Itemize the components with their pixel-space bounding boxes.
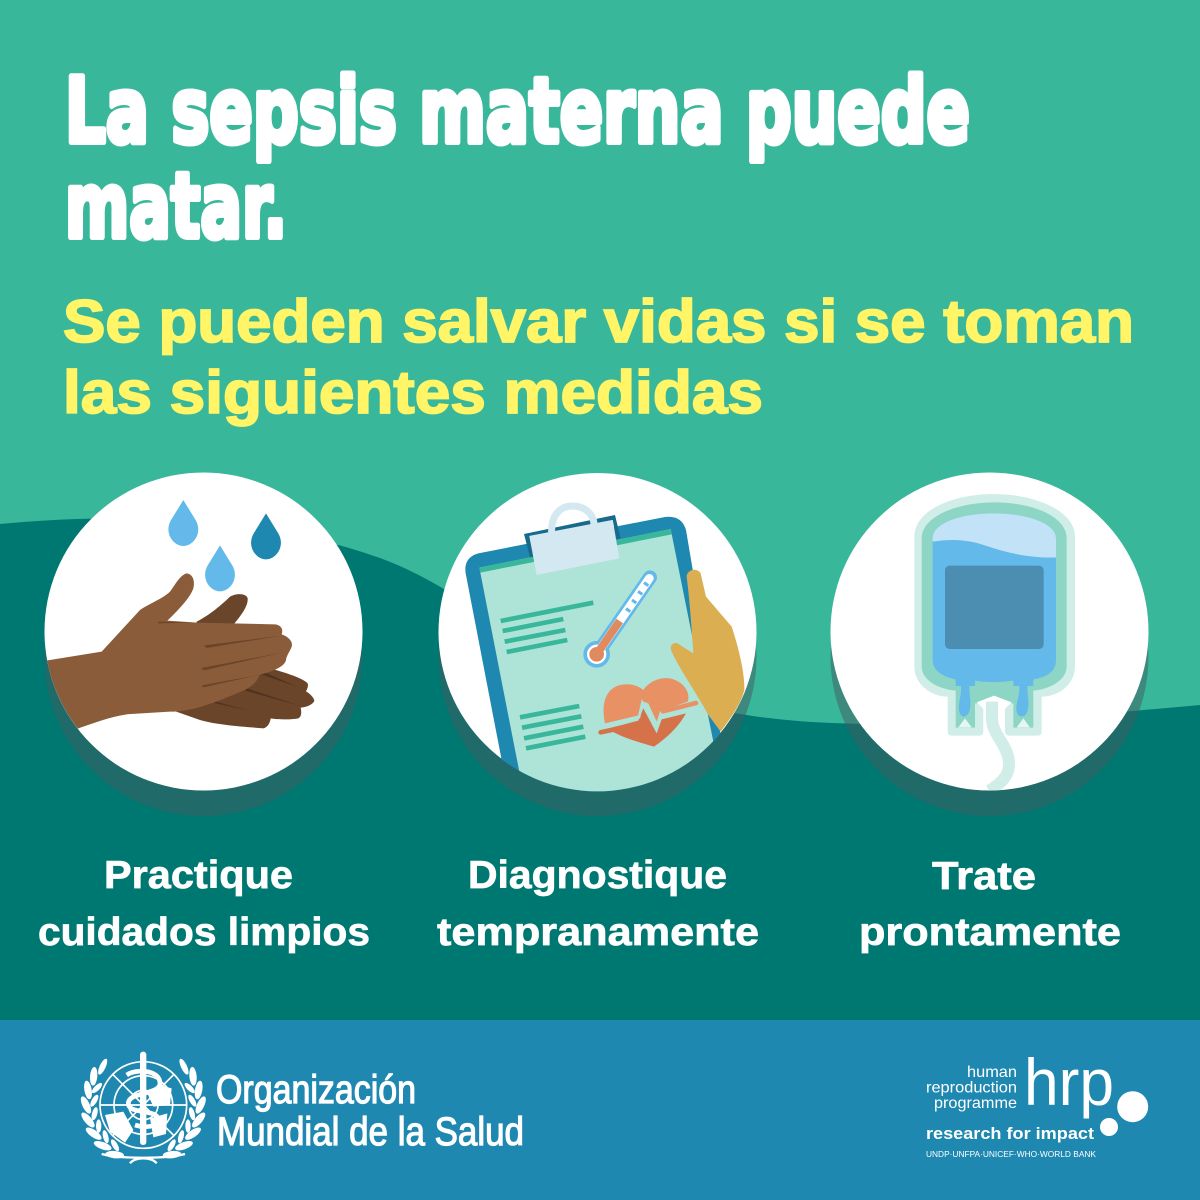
icon: clipboard with thermometer and heart	[465, 506, 744, 803]
logo: HRP research for impact: hrp	[1024, 1045, 1114, 1119]
logo text: Organización Mundial de la Salud: Mundial de la Salud	[217, 1110, 524, 1154]
subtitle: Se pueden salvar vidas si se toman	[63, 288, 1134, 355]
logo: HRP research for impact: UNDP·UNFPA·UNICEF·WHO·WORLD BANK	[926, 1150, 1097, 1159]
white circle: prompt treatment	[830, 472, 1148, 790]
label: clean care: cuidados limpios	[38, 911, 370, 954]
logo: HRP research for impact: research for impact	[926, 1125, 1095, 1143]
title	[65, 59, 970, 259]
logo: HRP research for impact: programme	[934, 1095, 1017, 1112]
logo: WHO emblem	[79, 1052, 208, 1163]
label: early diagnosis: tempranamente	[437, 911, 759, 954]
white circle: early diagnosis	[438, 473, 756, 791]
title: matar.	[65, 154, 287, 259]
logo: HRP research for impact	[926, 1045, 1148, 1159]
logo: HRP research for impact: human	[967, 1064, 1017, 1081]
logo text: Organización Mundial de la Salud	[216, 1068, 524, 1154]
label: clean care: Practique	[104, 854, 293, 897]
panel: prompt treatment	[830, 472, 1148, 816]
label: clean care	[38, 854, 370, 954]
label: prompt treatment: Trate	[932, 855, 1036, 898]
logo: HRP research for impact: reproduction	[926, 1080, 1017, 1096]
subtitle: las siguientes medidas	[63, 359, 763, 426]
panel: early diagnosis	[438, 473, 756, 816]
circle shadow: early diagnosis	[438, 498, 756, 816]
circle shadow: clean care	[44, 498, 362, 816]
label: early diagnosis: Diagnostique	[468, 854, 727, 897]
label: early diagnosis	[437, 854, 759, 954]
panel: clean care	[40, 472, 362, 816]
white circle: clean care	[44, 472, 362, 790]
logo text: Organización Mundial de la Salud: Organización	[216, 1068, 416, 1112]
dark teal wave background	[0, 518, 1200, 1030]
subtitle	[63, 288, 1134, 426]
circle shadow: prompt treatment	[830, 498, 1148, 816]
footer band	[0, 1020, 1200, 1200]
label: prompt treatment	[859, 855, 1121, 954]
icon: IV fluid bag	[914, 494, 1075, 791]
label: prompt treatment: prontamente	[859, 911, 1121, 954]
icon: washing hands	[40, 500, 314, 740]
